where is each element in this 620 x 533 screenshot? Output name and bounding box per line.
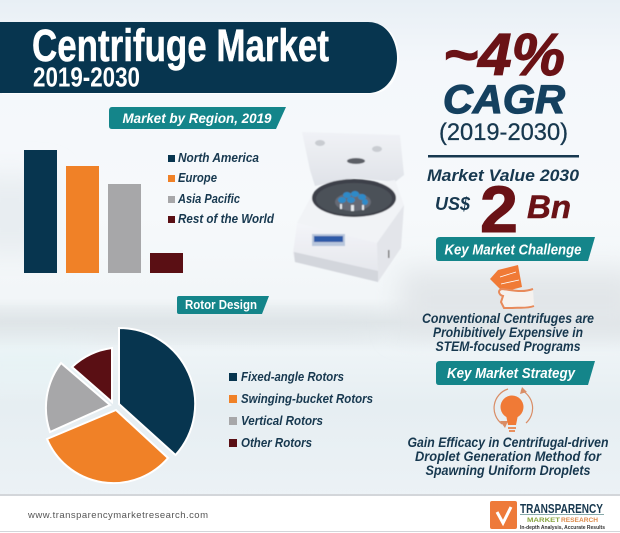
logo: RESEARCH (561, 517, 598, 524)
footer (0, 494, 620, 533)
centrifuge rotor tubes (338, 191, 368, 205)
CAGR label: CAGR (443, 78, 565, 122)
challenge text: Prohibitively Expensive in (433, 324, 583, 340)
title banner (0, 20, 399, 94)
heading: market by region: Market by Region, 2019 (122, 110, 272, 126)
market value: US$ (435, 194, 471, 214)
heading: rotor design (177, 296, 269, 314)
legend: rotors (229, 369, 373, 450)
legend: region: North America (178, 150, 259, 165)
market value heading: Market Value 2030 (427, 166, 580, 185)
centrifuge illustration (293, 132, 404, 282)
title text: Centrifuge Market (32, 20, 329, 71)
logo: In-depth Analysis, Accurate Results (520, 525, 605, 531)
icon: hand holding money (490, 265, 534, 308)
icon: light bulb with cycle arrows (494, 387, 533, 432)
pie chart (46, 328, 195, 483)
legend: rotors: Fixed-angle Rotors (241, 369, 344, 384)
legend: rotors: Swinging-bucket Rotors (241, 391, 373, 406)
legend: region: Europe (178, 170, 217, 185)
divider (428, 155, 579, 158)
heading: market by region (109, 107, 286, 129)
challenge text (422, 310, 594, 354)
heading: rotor design: Rotor Design (185, 298, 257, 312)
logo (490, 501, 605, 531)
CAGR value: ~4% (443, 22, 565, 88)
logo: MARKET (527, 517, 560, 524)
title years: 2019-2030 (33, 62, 140, 92)
website url: www.transparencymarketresearch.com (27, 510, 208, 521)
market value: Bn (527, 189, 571, 225)
legend: region: Rest of the World (178, 211, 275, 226)
heading: key market strategy (436, 361, 595, 385)
strategy text (408, 434, 608, 478)
legend: rotors: Other Rotors (241, 435, 312, 450)
heading: key market challenge: Key Market Challenge (444, 242, 582, 258)
heading: key market strategy: Key Market Strategy (447, 365, 576, 382)
bar chart (24, 150, 183, 273)
strategy text: Spawning Uniform Droplets (426, 462, 591, 478)
challenge text: Conventional Centrifuges are (422, 310, 594, 326)
market value (435, 172, 571, 246)
legend: region: Asia Pacific (177, 191, 241, 206)
market value: 2 (480, 172, 518, 246)
challenge text: STEM-focused Programs (436, 338, 581, 354)
strategy text: Droplet Generation Method for (415, 448, 602, 464)
legend: rotors: Vertical Rotors (241, 413, 323, 428)
legend: region (168, 150, 275, 226)
heading: key market challenge (436, 237, 595, 261)
CAGR period: (2019-2030) (439, 119, 568, 146)
